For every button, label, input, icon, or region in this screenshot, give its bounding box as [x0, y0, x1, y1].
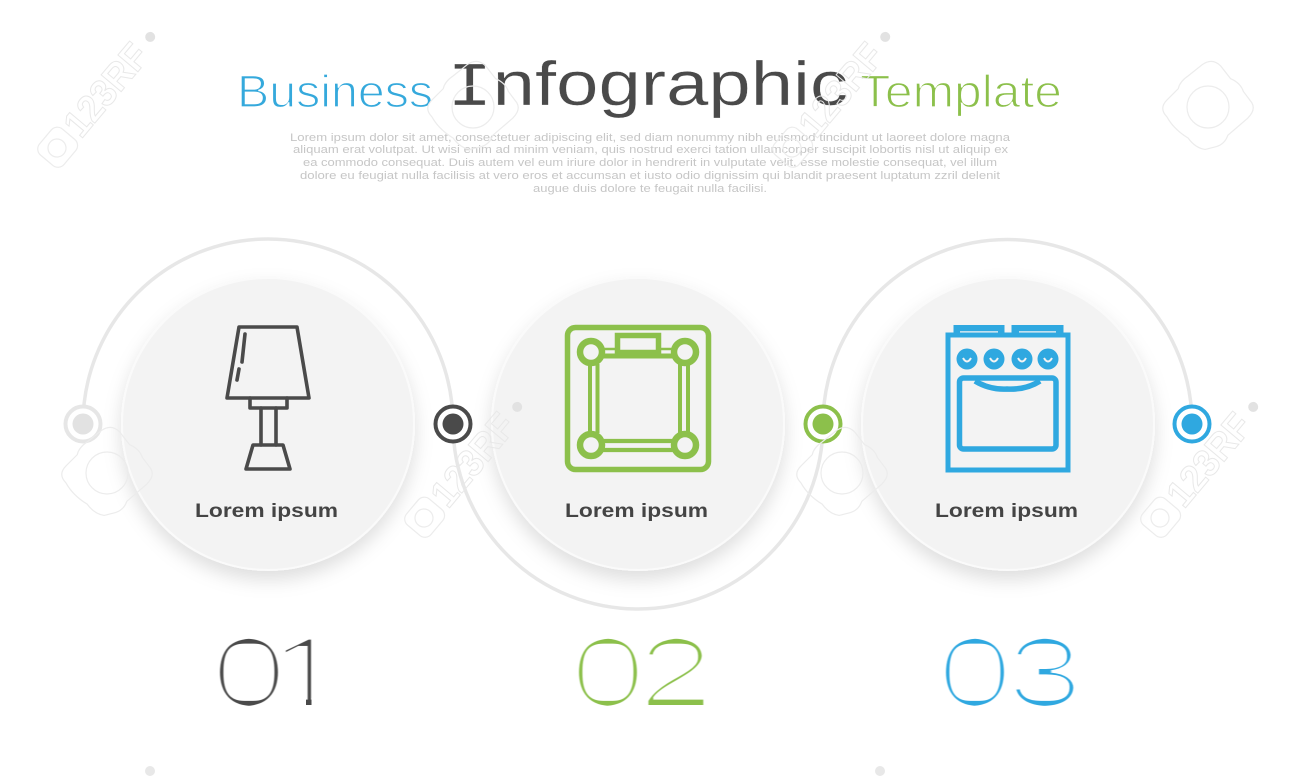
title: [237, 50, 1062, 124]
number 02: 02: [569, 618, 715, 727]
watermark: logos: 123RF: [791, 36, 892, 145]
label: step 2: Lorem ipsum: [565, 501, 708, 522]
number 01: 01: [210, 618, 346, 727]
body text block: Lorem ipsum dolor sit amet, consectetuer adipiscing elit, sed diam nonummy nibh euismod tincidunt ut laoreet dolore magna: [290, 132, 1011, 144]
body text block: augue duis dolore te feugait nulla facilisi.: [533, 183, 767, 195]
watermark: logos: 123RF: [1159, 406, 1260, 515]
icon: table lamp: [227, 327, 309, 469]
panel: step 2 circle: [492, 278, 784, 570]
marker: start dot: [66, 406, 100, 442]
number 03: 03: [936, 618, 1084, 727]
marker: step 2 dot: [806, 406, 840, 442]
marker: step 3 dot: [1174, 406, 1210, 442]
body text block: aliquam erat volutpat. Ut wisi enim ad minim veniam, quis nostrud exerci tation ullamcorper suscipit lobortis nisl ut aliquip ex: [293, 144, 1009, 156]
marker: step 1 dot: [436, 406, 470, 442]
label: step 1: Lorem ipsum: [195, 501, 338, 522]
icon: bathroom scale: [568, 328, 708, 470]
watermark: logos: 123RF: [423, 406, 524, 515]
panel: step 1 circle: [122, 278, 414, 570]
body text block: dolore eu feugiat nulla facilisis at vero eros et accumsan et iusto odio dignissim qui blandit praesent luptatum zzril delenit: [300, 170, 1000, 182]
label: step 3: Lorem ipsum: [935, 501, 1078, 522]
icon: oven: [948, 328, 1068, 470]
watermark: logos: 123RF: [56, 36, 157, 145]
title: Template: [860, 66, 1062, 117]
panel: step 3 circle: [862, 278, 1154, 570]
title: Business: [237, 66, 433, 117]
title: Infographic: [447, 50, 848, 124]
body text block: [290, 132, 1011, 195]
body text block: ea commodo consequat. Duis autem vel eum iriure dolor in hendrerit in vulputate velit, esse molestie consequat, vel illum: [303, 157, 997, 169]
connector arcs: [83, 239, 1192, 609]
